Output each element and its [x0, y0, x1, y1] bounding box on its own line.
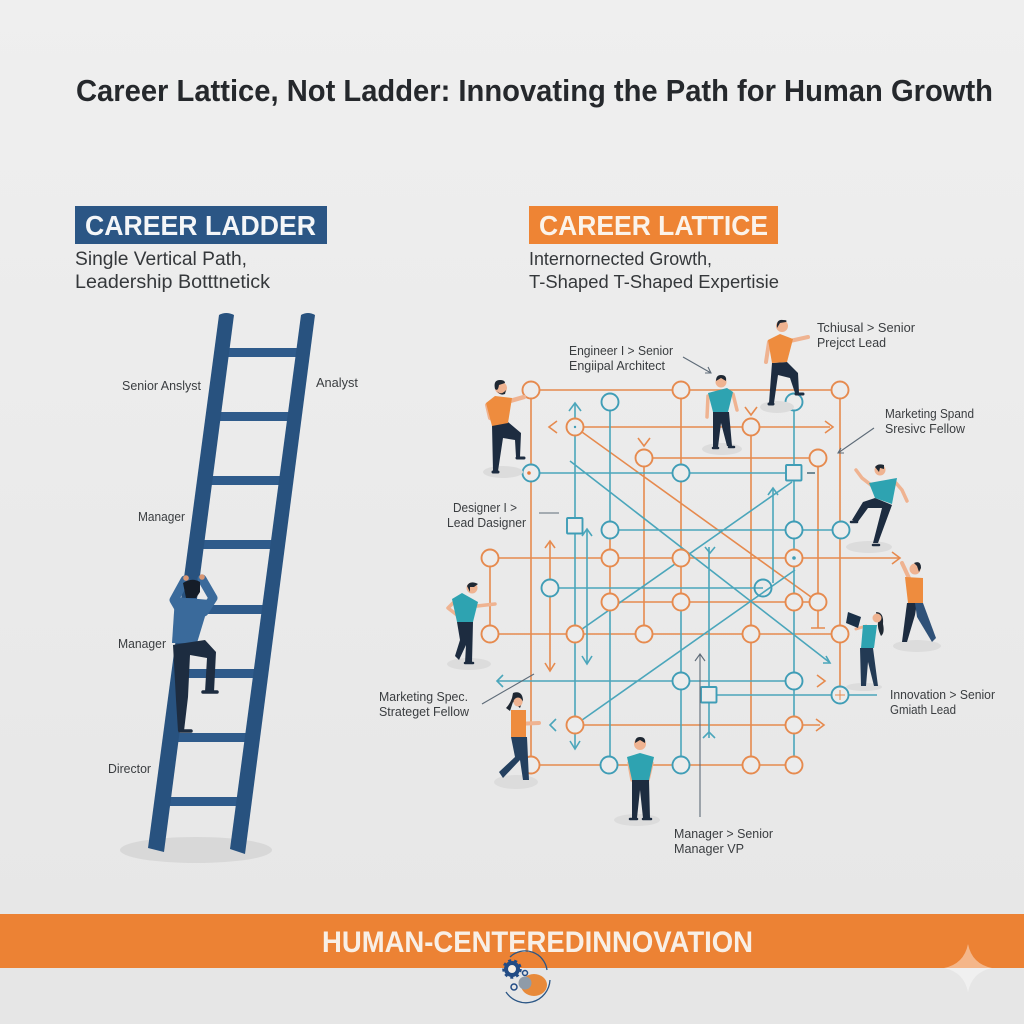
ladder labels: Senior Anslyst [122, 379, 202, 393]
person: teal shirt, left [447, 582, 495, 670]
climber figure [172, 574, 217, 731]
lattice callout labels [379, 321, 995, 856]
lattice callout labels: Sresivc Fellow [885, 422, 966, 436]
ladder subtitle [75, 249, 271, 293]
person: teal shirt, running right [846, 464, 907, 553]
ladder labels [108, 376, 359, 776]
person: teal shirt, top center [702, 375, 742, 455]
panel: career lattice heading: CAREER LATTICE [539, 210, 768, 241]
person: orange shirt, far right [893, 562, 941, 652]
person: teal shirt, bottom [614, 737, 660, 826]
arrowheads [545, 407, 900, 731]
lattice network [482, 382, 900, 774]
person: orange shirt, top right [760, 320, 808, 413]
lattice callout labels: Marketing Spand [885, 407, 974, 421]
lattice callout labels: Lead Dasigner [447, 516, 526, 530]
ladder illustration [120, 313, 315, 863]
person: orange shirt, woman walking [494, 692, 539, 789]
lattice callout labels: Manager VP [674, 842, 744, 856]
orange connections [490, 390, 900, 765]
ladder labels: Analyst [316, 376, 359, 390]
banner [0, 914, 1024, 968]
teal connections [497, 402, 877, 765]
lattice callout labels: Gmiath Lead [890, 703, 956, 717]
ladder labels: Manager [138, 510, 185, 524]
icon: sparkle [944, 944, 992, 992]
lattice callout labels: Engineer I > Senior [569, 344, 673, 358]
lattice subtitle: T-Shaped T-Shaped Expertisie [529, 272, 779, 292]
lattice subtitle [529, 249, 779, 292]
lattice callout labels: Prejcct Lead [817, 336, 886, 350]
lattice callout labels: Engiipal Architect [569, 359, 666, 373]
lattice callout labels: Marketing Spec. [379, 690, 468, 704]
ladder subtitle: Leadership Botttnetick [75, 272, 271, 293]
lattice callout labels: Designer I > [453, 501, 517, 515]
leader lines [482, 357, 874, 817]
title: Career Lattice, Not Ladder: Innovating the Path for Human Growth [76, 74, 993, 108]
person: orange shirt, upper left [483, 380, 524, 478]
lattice callout labels: Strateget Fellow [379, 705, 470, 719]
icon: gears and brain logo [504, 951, 550, 1003]
banner: HUMAN-CENTEREDINNOVATION [322, 926, 753, 959]
lattice callout labels: Innovation > Senior [890, 688, 995, 702]
ladder labels: Director [108, 762, 151, 776]
ladder subtitle: Single Vertical Path, [75, 249, 247, 270]
ladder labels: Manager [118, 637, 166, 651]
person: teal shirt with tablet [846, 612, 884, 691]
lattice callout labels: Tchiusal > Senior [817, 321, 915, 335]
panel: career ladder heading: CAREER LADDER [85, 210, 316, 241]
lattice callout labels: Manager > Senior [674, 827, 773, 841]
nodes [482, 382, 848, 774]
lattice subtitle: Internornected Growth, [529, 249, 712, 269]
